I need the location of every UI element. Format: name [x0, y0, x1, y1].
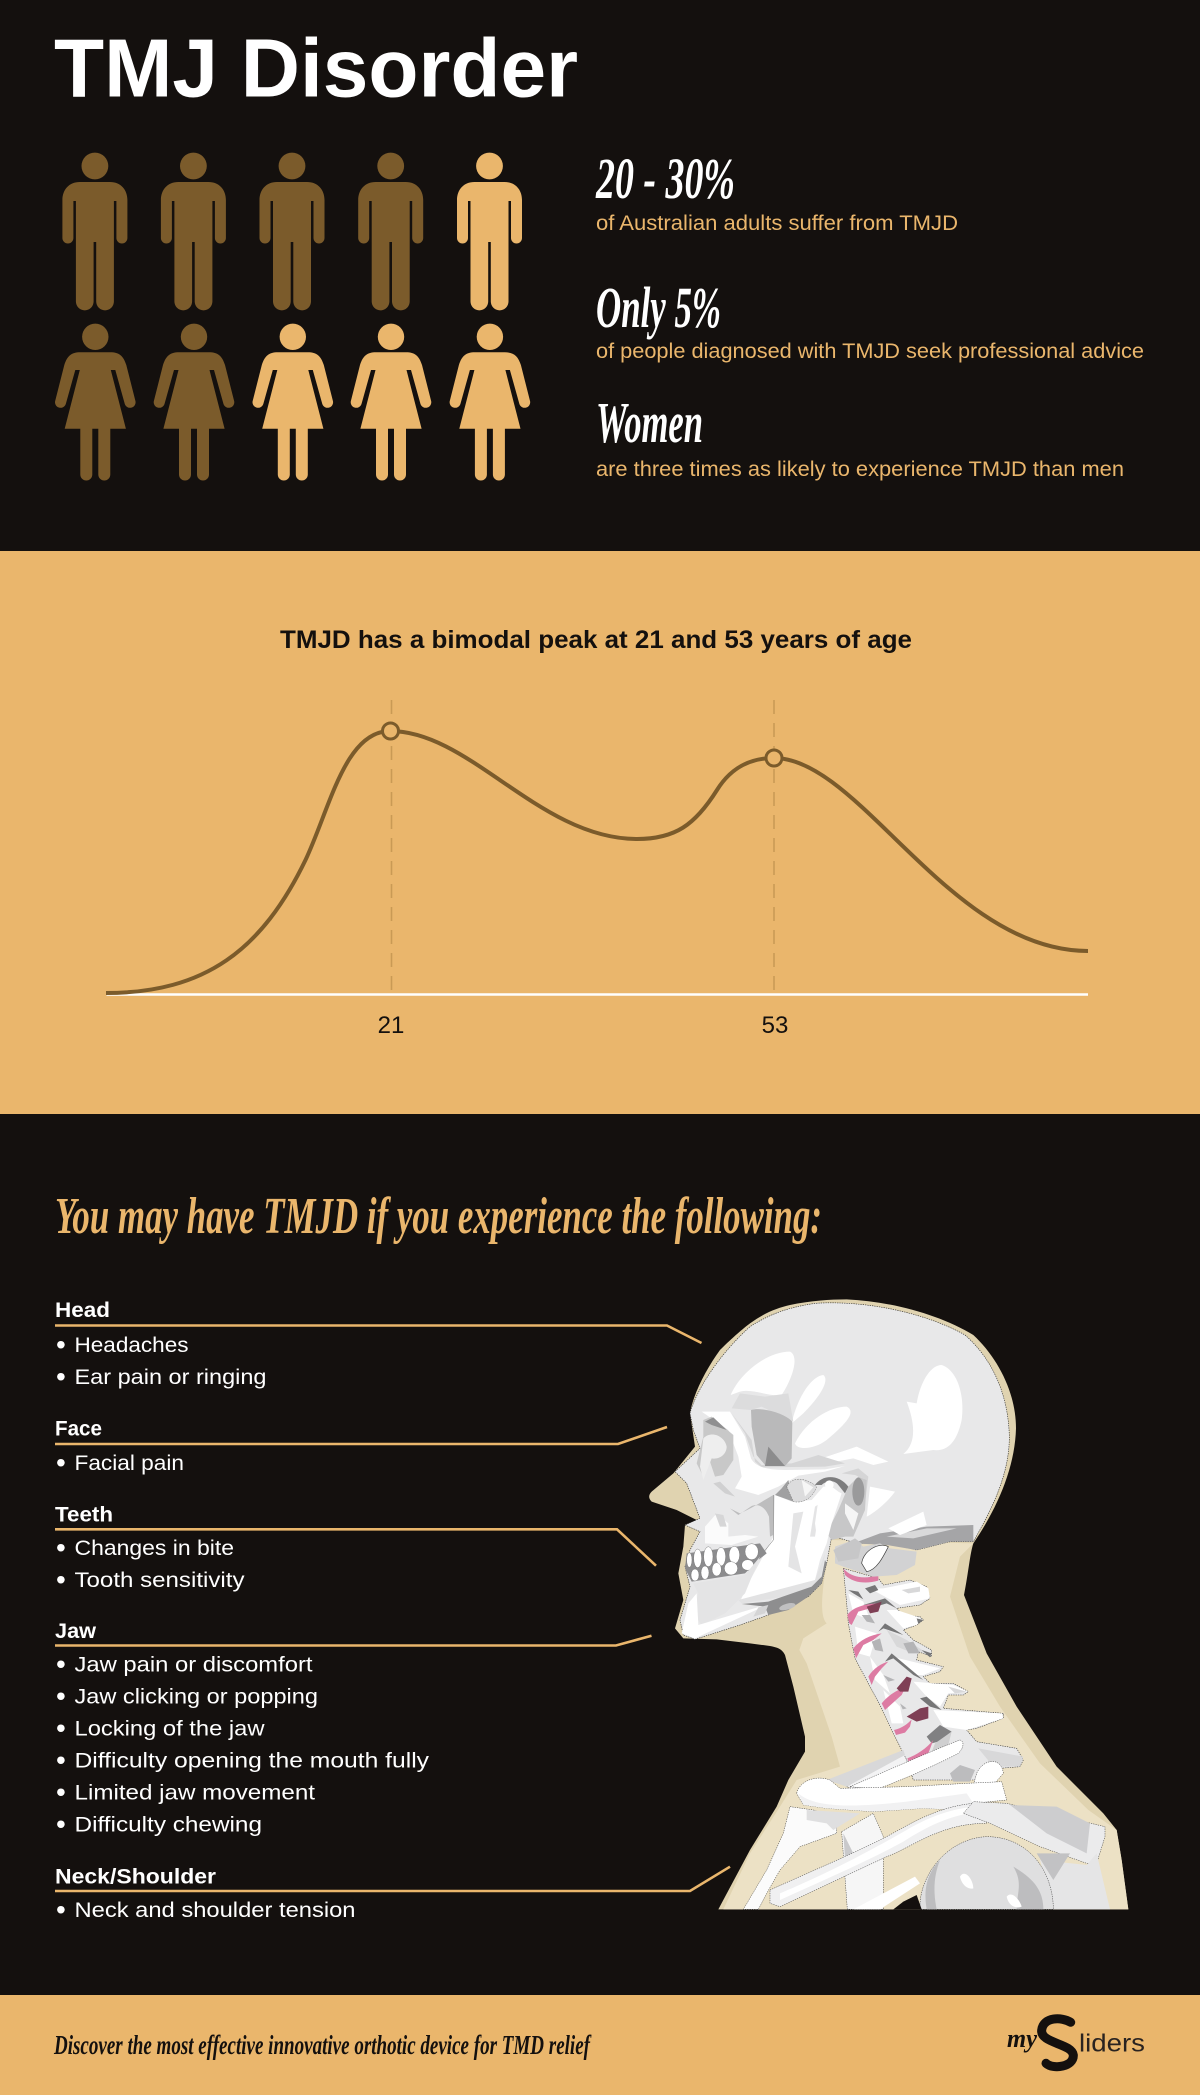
clavicle: [797, 1778, 1007, 1812]
parietal highlight two: [795, 1407, 851, 1448]
stat: only 5%: of people diagnosed with TMJD seek professional advice: [596, 340, 1144, 363]
stat: only 5%: [596, 275, 1144, 363]
first rib: [847, 1740, 963, 1790]
lower jaw shadow: [742, 1560, 827, 1615]
symptom group: head: Headaches: [74, 1333, 188, 1357]
pictogram: five men, four dark and one light: [62, 153, 522, 310]
atlas vertebra: [835, 1540, 917, 1577]
symptom group: jaw: •: [56, 1808, 66, 1840]
forehead highlight: [731, 1352, 795, 1395]
lower skeleton: [743, 1568, 1110, 1909]
orbit interior: [700, 1435, 727, 1480]
mandible line: [760, 1495, 773, 1557]
symptom group: jaw: Difficulty chewing: [74, 1812, 262, 1836]
cervical spine: [843, 1568, 1023, 1780]
symptom group: jaw: Difficulty opening the mouth fully: [74, 1748, 429, 1772]
articular eminence: [787, 1479, 817, 1502]
arch highlight: [807, 1447, 888, 1465]
logo: my: [1007, 2024, 1037, 2053]
intervertebral discs: [843, 1568, 933, 1764]
upper temporal shade: [732, 1393, 793, 1422]
symptom group: neck and shoulder: Neck and shoulder tension: [74, 1898, 356, 1922]
first thoracic arc: [973, 1761, 1003, 1785]
occipital highlight: [903, 1365, 962, 1454]
zygomatic shadow: [730, 1495, 773, 1537]
spinous process shade: [887, 1587, 1023, 1767]
footer tagline: Discover the most effective innovative orthotic device for TMD relief: [53, 2030, 592, 2060]
tooth socket: [685, 1543, 767, 1582]
symptom group: neck and shoulder: Neck/Shoulder: [55, 1865, 217, 1889]
orbit dark wedge: [705, 1417, 727, 1430]
second cervical rib: [850, 1740, 963, 1789]
axis label 21: 21: [378, 1012, 404, 1039]
scapular spine: [963, 1802, 1105, 1863]
symptom group: teeth: Tooth sensitivity: [74, 1568, 245, 1592]
symptom group: head: •: [56, 1329, 66, 1360]
ramus neck: [815, 1488, 842, 1560]
symptom group: jaw: •: [56, 1712, 66, 1744]
section heading: You may have TMJD if you experience the following:: [55, 1188, 822, 1245]
lower teeth: [691, 1560, 754, 1581]
temporal fossa dark: [765, 1447, 785, 1466]
symptom group: jaw: •: [56, 1776, 66, 1808]
temporal fossa: [751, 1409, 792, 1466]
T1 grey patch: [950, 1765, 975, 1782]
illustration: head and neck skeleton: [649, 1299, 1128, 1909]
symptom group: face: Facial pain: [74, 1451, 184, 1475]
lighter neck skin: [723, 1540, 1128, 1909]
maxilla highlight: [705, 1513, 758, 1545]
symptom group: head: [55, 1298, 702, 1392]
sternum and cartilage: [842, 1813, 883, 1909]
skull and jaw base: [675, 1303, 1009, 1639]
articular fossa: [815, 1477, 848, 1493]
x axis: [106, 993, 1088, 996]
logo: [1007, 2019, 1145, 2067]
symptom group: jaw: •: [56, 1680, 66, 1712]
logo: liders: [1079, 2030, 1145, 2058]
scapular shade: [1010, 1805, 1090, 1853]
chart heading: TMJD has a bimodal peak at 21 and 53 years of age: [280, 626, 912, 654]
face details: [682, 1393, 868, 1638]
styloid highlight: [888, 1512, 927, 1535]
atlas highlight: [862, 1545, 888, 1572]
eminence dark: [775, 1480, 793, 1502]
peak marker 21: [382, 723, 398, 739]
title: TMJ Disorder: [54, 22, 578, 114]
temporal light shade: [732, 1413, 845, 1467]
chin rim highlight: [682, 1593, 767, 1638]
mastoid wedge: [833, 1538, 862, 1562]
symptom group: jaw: Jaw: [55, 1619, 96, 1643]
nasal spot: [715, 1513, 727, 1527]
symptom group: jaw: Limited jaw movement: [74, 1780, 315, 1804]
condyle: [825, 1480, 834, 1489]
stat: women: are three times as likely to experience TMJD than men: [596, 458, 1124, 481]
symptom group: face: •: [56, 1447, 66, 1478]
stat: 20 - 30%: of Australian adults suffer from TMJD: [596, 212, 958, 235]
symptom group: teeth: Changes in bite: [74, 1536, 234, 1560]
skull base shading: [853, 1525, 973, 1550]
symptom group: jaw: Jaw pain or discomfort: [74, 1652, 313, 1676]
mandible lower shade: [738, 1553, 825, 1603]
vertebra grey patches: [862, 1615, 920, 1709]
symptom group: head: •: [56, 1361, 66, 1392]
dark oval: [852, 1478, 864, 1506]
humeral ring shade: [925, 1860, 1043, 1909]
symptom group: teeth: •: [56, 1564, 66, 1595]
rib shade: [827, 1750, 905, 1787]
symptom group: face: Face: [55, 1417, 102, 1441]
black notch at base: [893, 1895, 922, 1909]
mandibular foramen: [779, 1602, 796, 1612]
dark disc shadows: [867, 1602, 928, 1722]
spinous process highlights: [848, 1582, 1003, 1730]
upper arm side bone: [1040, 1853, 1110, 1909]
footer band: [0, 1995, 1200, 2095]
stat: women: [596, 390, 1124, 481]
symptom group: face: [55, 1417, 667, 1478]
symptom group: teeth: [55, 1503, 656, 1595]
dashed guide at age 21: [390, 700, 392, 990]
nasal line: [713, 1482, 735, 1497]
symptom group: neck and shoulder: [55, 1865, 730, 1925]
sternal shadow: [843, 1833, 853, 1858]
parietal highlight one: [792, 1375, 825, 1423]
humeral head: [920, 1837, 1053, 1909]
sphenoid shade: [827, 1477, 867, 1540]
sternoclavicular bone: [743, 1807, 837, 1909]
sphenoid stripe: [845, 1503, 858, 1530]
incidence curve: [106, 731, 1088, 993]
orbit: [697, 1417, 733, 1477]
upper teeth: [687, 1544, 758, 1568]
clavicle soft shade: [798, 1793, 973, 1812]
sternoclavicular shade: [807, 1810, 860, 1830]
symptom group: jaw: Jaw clicking or popping: [74, 1684, 318, 1708]
symptom group: jaw: Locking of the jaw: [74, 1716, 265, 1740]
stat: 20 - 30%: [595, 146, 958, 235]
eminence highlight: [802, 1480, 813, 1497]
symptom group: head: Ear pain or ringing: [74, 1365, 266, 1389]
dashed guide at age 53: [773, 700, 775, 990]
brow and cheek highlight: [702, 1412, 845, 1495]
mastoid highlight: [867, 1487, 895, 1517]
vertebral column: [843, 1568, 1023, 1780]
scapula shadow: [1037, 1853, 1070, 1880]
skull base light band: [887, 1528, 957, 1538]
skin silhouette: [649, 1299, 1128, 1909]
symptom group: teeth: •: [56, 1532, 66, 1563]
panel: bimodal peak chart: [0, 551, 1200, 1114]
symptom group: jaw: [55, 1619, 652, 1840]
chin shade: [693, 1557, 760, 1625]
symptom group: jaw: •: [56, 1744, 66, 1776]
peak marker 53: [766, 750, 782, 766]
humeral highlights: [960, 1874, 1022, 1907]
vertebra roof shadows: [848, 1585, 942, 1710]
T1 shadow: [927, 1725, 952, 1743]
rib highlight: [780, 1807, 980, 1900]
axis label 53: 53: [762, 1012, 788, 1039]
mandible body: [740, 1487, 838, 1602]
chin bar: [753, 1605, 768, 1617]
stat: 20 - 30%: 20 - 30%: [595, 146, 735, 211]
symptom group: jaw: •: [56, 1648, 66, 1680]
symptom group: neck and shoulder: •: [56, 1894, 66, 1925]
pictogram: five women, two dark and three light: [55, 324, 530, 480]
stat: women: Women: [596, 390, 703, 455]
lower rib: [853, 1877, 920, 1909]
mandible stripes: [788, 1503, 820, 1573]
second rib: [770, 1803, 987, 1907]
symptom group: head: Head: [55, 1298, 110, 1322]
symptom group: teeth: Teeth: [55, 1503, 113, 1527]
neck joint shade: [842, 1468, 868, 1513]
T1 soft shadow: [930, 1732, 952, 1757]
stat: only 5%: Only 5%: [596, 275, 721, 340]
